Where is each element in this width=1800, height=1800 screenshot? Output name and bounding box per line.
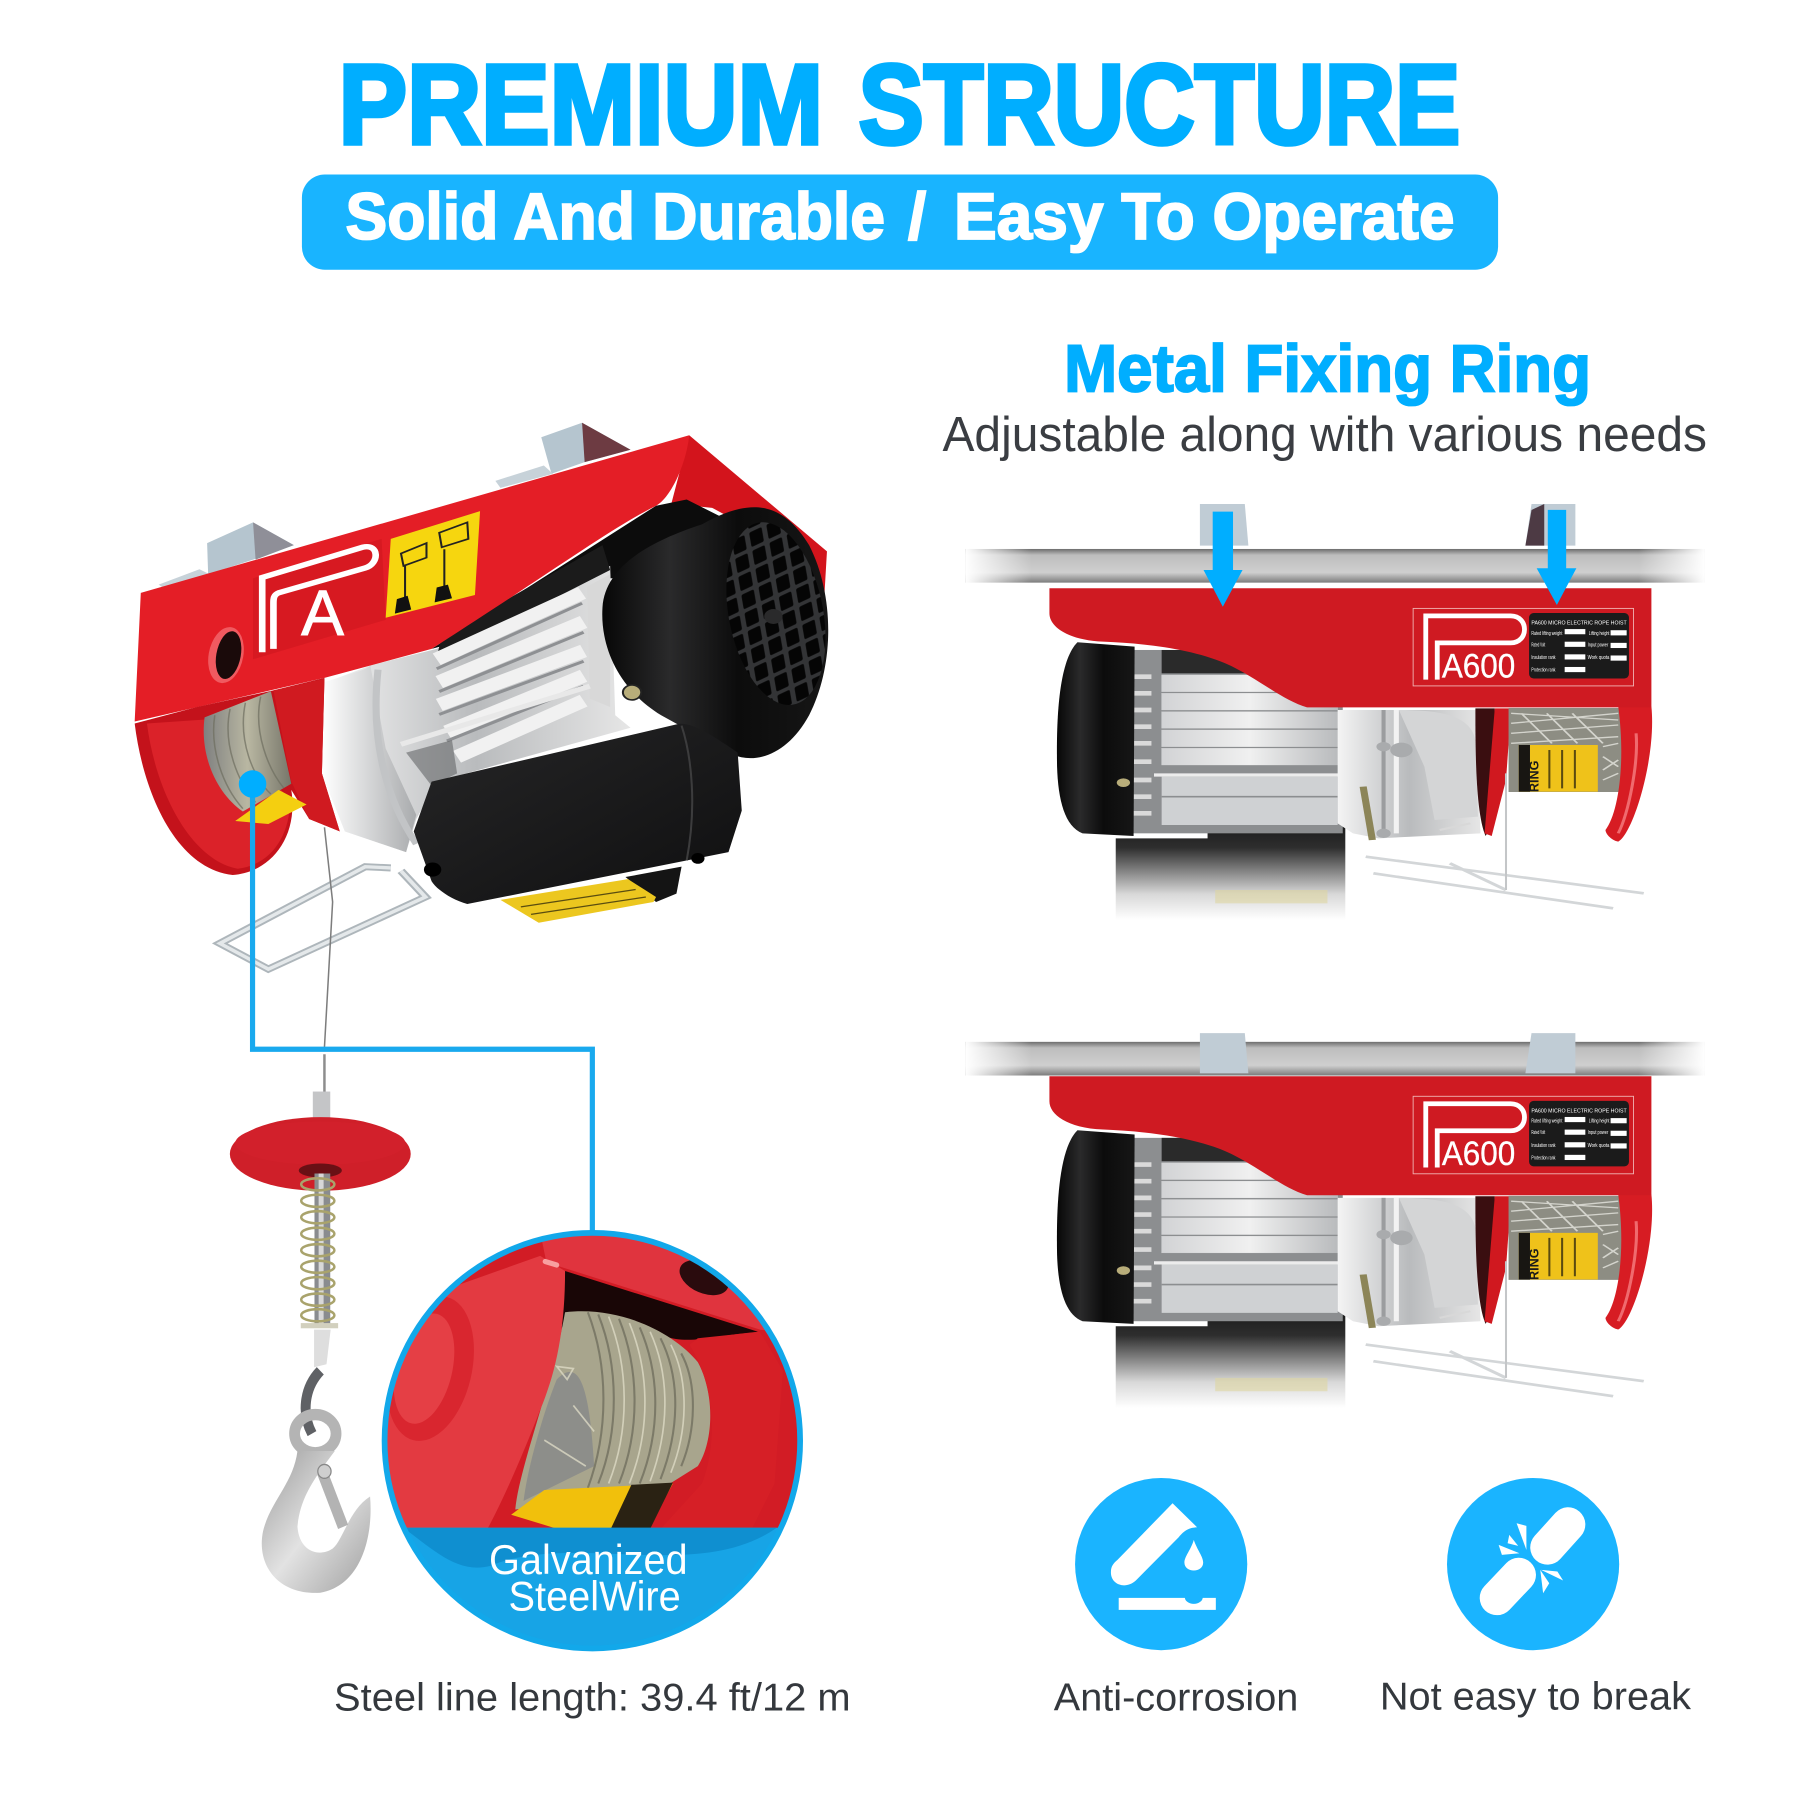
warning fragment: RING	[1527, 760, 1541, 792]
arrow: right clip	[1537, 510, 1576, 605]
title: PREMIUM	[339, 41, 823, 168]
far flange highlight	[696, 1332, 756, 1393]
spec text: Insulation rank	[1531, 1143, 1556, 1149]
motor fins	[1128, 650, 1378, 833]
spec text: Rated lifting weight	[1531, 631, 1563, 637]
caption: Galvanized	[489, 1537, 688, 1583]
hoist on beam, bottom view	[965, 1033, 1705, 1408]
nameplate	[1413, 608, 1634, 686]
gear housing	[1338, 710, 1480, 840]
steel hanger clips	[159, 423, 631, 590]
subtitle pill	[302, 174, 1498, 270]
title: STRUCTURE	[859, 41, 1460, 168]
motor cap	[1057, 642, 1135, 836]
red limit disc	[230, 1117, 411, 1191]
spec text: Input power	[1588, 1130, 1608, 1136]
drum flanges	[1475, 1196, 1511, 1324]
label: anti-corrosion: Anti-corrosion	[1054, 1676, 1298, 1719]
motor fan cap	[602, 507, 839, 758]
subtitle text: Solid And Durable	[346, 180, 885, 253]
spec text: Rated lifting weight	[1531, 1119, 1563, 1125]
controller sticker remnant	[1215, 1378, 1327, 1391]
circle outline	[385, 1233, 800, 1648]
label: not easy to break: Not easy to break	[1380, 1675, 1691, 1718]
spec plate	[1529, 1101, 1629, 1166]
spec text: Protection rank	[1531, 1155, 1556, 1161]
motor silver body	[322, 545, 631, 852]
spec text: Work quota	[1588, 655, 1610, 661]
warning fragment: RING	[1527, 1248, 1541, 1280]
controller fade	[1116, 817, 1345, 920]
clips	[1200, 1033, 1575, 1073]
clips	[1200, 504, 1575, 546]
test tube	[1111, 1503, 1197, 1585]
icon: not easy to break	[1447, 1478, 1619, 1650]
beam	[965, 548, 1705, 583]
spec plate	[1529, 613, 1629, 678]
dark cavity	[561, 1271, 758, 1340]
red front beam	[135, 435, 689, 721]
wire handle	[220, 867, 425, 969]
wire spool	[1509, 708, 1623, 792]
spec text: Lifting height	[1589, 631, 1610, 637]
logo letter A: A	[301, 577, 344, 649]
logo panel and P mark	[253, 539, 386, 659]
sub heading: Adjustable along with various needs	[942, 407, 1707, 462]
main hoist photo illustration	[135, 423, 839, 1047]
hook body	[262, 1371, 371, 1593]
title	[339, 41, 1460, 168]
wire spool	[515, 1311, 710, 1510]
spec text: Lifting height	[1589, 1119, 1610, 1125]
dark shadow under beam	[432, 500, 773, 649]
spec text: Input power	[1588, 642, 1608, 648]
spring and rod	[301, 1173, 338, 1328]
callout dot	[239, 770, 266, 798]
spec text: Rated Volt	[1531, 642, 1545, 648]
motor fins	[1128, 1138, 1378, 1321]
subtitle text	[346, 180, 1454, 253]
beam slot hole	[204, 625, 248, 685]
magnified circle: wire drum	[373, 1228, 806, 1658]
spec text	[1531, 620, 1627, 674]
spec text: PA600 MICRO ELECTRIC ROPE HOIST	[1531, 620, 1627, 626]
right drum flange	[1605, 1195, 1652, 1330]
caption line 2: SteelWire	[509, 1574, 681, 1620]
top plate	[542, 1236, 765, 1330]
steel line caption: Steel line length: 39.4 ft/12 m	[334, 1676, 851, 1719]
spec text: PA600 MICRO ELECTRIC ROPE HOIST	[1531, 1108, 1627, 1114]
crimped sleeve	[314, 1330, 331, 1367]
hook assembly	[230, 1054, 411, 1593]
subtitle text: /	[908, 180, 926, 253]
near flange	[373, 1256, 565, 1531]
spec text	[1531, 1108, 1627, 1161]
shards	[1499, 1523, 1563, 1593]
rope top	[324, 827, 333, 1047]
wire and crimp	[313, 1054, 330, 1120]
yellow warning sticker	[386, 511, 480, 618]
model number: A600	[1442, 647, 1515, 685]
heading: metal fixing ring: Metal Fixing Ring	[1064, 332, 1591, 406]
icon: anti-corrosion	[1075, 1478, 1247, 1650]
pill background	[302, 174, 1498, 270]
model number: A600	[1442, 1135, 1515, 1173]
right drum flange	[1605, 707, 1652, 842]
handle	[1366, 1261, 1644, 1396]
spec text: Work quota	[1588, 1143, 1610, 1149]
logo P	[1426, 616, 1524, 680]
red drum flanges with wire	[135, 678, 340, 875]
beam	[965, 1041, 1705, 1076]
logo P	[1426, 1104, 1524, 1167]
blue caption band	[406, 1528, 778, 1646]
lower link	[1497, 1575, 1519, 1598]
corroded plate	[1119, 1598, 1216, 1610]
controller box	[414, 724, 742, 904]
sticker under controller	[500, 867, 682, 923]
spec text: Rated Volt	[1531, 1130, 1545, 1136]
arrow: left clip	[1204, 512, 1243, 607]
nameplate	[1413, 1096, 1634, 1174]
drop	[1184, 1540, 1203, 1571]
wire spool	[1509, 1196, 1623, 1280]
controller sticker remnant	[1215, 890, 1327, 903]
hoist on beam, top view	[965, 504, 1705, 920]
red side plate	[671, 435, 827, 595]
spec text: Insulation rank	[1531, 655, 1556, 661]
subtitle text: Easy To Operate	[954, 180, 1454, 253]
handle	[1366, 773, 1644, 908]
spec text: Protection rank	[1531, 668, 1556, 674]
controller fade	[1116, 1305, 1345, 1408]
upper link	[1547, 1524, 1568, 1547]
corrosion pit	[1185, 1591, 1203, 1604]
motor cap	[1057, 1130, 1135, 1324]
yellow tag	[511, 1483, 673, 1531]
red beam body	[1049, 1076, 1651, 1195]
callout line from drum to detail	[239, 770, 592, 1235]
gear housing	[1338, 1198, 1480, 1328]
red interior	[459, 1242, 798, 1528]
red beam body	[1049, 588, 1651, 707]
drum flanges	[1475, 708, 1511, 836]
